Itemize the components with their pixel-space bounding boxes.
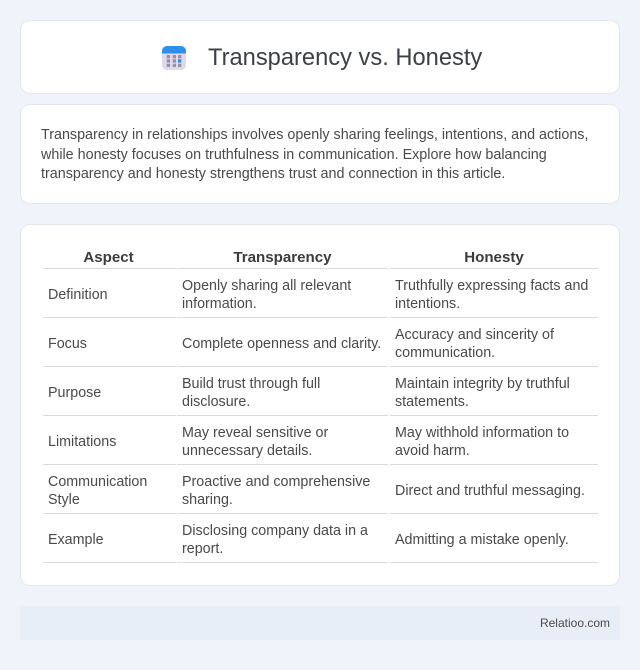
footer bbox=[20, 606, 620, 640]
row: Definition: information. bbox=[182, 296, 257, 312]
row: Focus: Complete openness and clarity. bbox=[182, 336, 381, 352]
row: Limitations: May withhold information to bbox=[395, 425, 569, 441]
row: Communication Style: Style bbox=[48, 492, 80, 508]
row: Communication Style: Communication bbox=[48, 474, 147, 490]
panel: comparison table bbox=[20, 224, 620, 586]
row: Definition: Truthfully expressing facts and bbox=[395, 278, 588, 294]
row: Purpose: statements. bbox=[395, 394, 469, 410]
row: Focus bbox=[48, 327, 554, 361]
row: Communication Style: Proactive and comprehensive bbox=[182, 474, 370, 490]
footer credit: Relatioo.com bbox=[540, 616, 610, 630]
row: Focus: Accuracy and sincerity of bbox=[395, 327, 554, 343]
table header bbox=[83, 249, 524, 266]
row: Definition: Openly sharing all relevant bbox=[182, 278, 351, 294]
row: Purpose: Build trust through full bbox=[182, 376, 320, 392]
row: Limitations bbox=[48, 425, 569, 459]
row: Limitations: unnecessary details. bbox=[182, 443, 312, 459]
row: Example: Admitting a mistake openly. bbox=[395, 532, 569, 548]
row: Purpose: Maintain integrity by truthful bbox=[395, 376, 570, 392]
row: Limitations: Limitations bbox=[48, 434, 116, 450]
row: Example bbox=[48, 523, 569, 557]
row: Definition: Definition bbox=[48, 287, 108, 303]
row: Focus: communication. bbox=[395, 345, 495, 361]
table header: Honesty bbox=[464, 249, 524, 266]
row: Definition bbox=[48, 278, 588, 312]
row: Purpose: Purpose bbox=[48, 385, 101, 401]
panel: title card bbox=[20, 20, 620, 94]
row: Purpose bbox=[48, 376, 570, 410]
text block: introduction: while honesty focuses on truthfulness in communication. Explore how balancing bbox=[41, 147, 547, 163]
title: Transparency vs. Honesty bbox=[208, 45, 482, 71]
row: Definition: intentions. bbox=[395, 296, 460, 312]
row: Example: report. bbox=[182, 541, 223, 557]
text block: introduction: Transparency in relationships involves openly sharing feelings, intentions, and actions, bbox=[41, 127, 588, 143]
row: Limitations: avoid harm. bbox=[395, 443, 470, 459]
row: Communication Style bbox=[48, 474, 585, 508]
table header: Aspect bbox=[83, 249, 134, 266]
icon: calendar bbox=[162, 46, 186, 70]
row: Limitations: May reveal sensitive or bbox=[182, 425, 328, 441]
text block: introduction: transparency and honesty strengthens trust and connection in this article. bbox=[41, 166, 505, 182]
panel: introduction bbox=[20, 104, 620, 204]
row: Focus: Focus bbox=[48, 336, 87, 352]
row: Communication Style: sharing. bbox=[182, 492, 233, 508]
row: Communication Style: Direct and truthful messaging. bbox=[395, 483, 585, 499]
table header: Transparency bbox=[233, 249, 332, 266]
row: Purpose: disclosure. bbox=[182, 394, 250, 410]
text block: introduction bbox=[41, 127, 588, 182]
row: Example: Disclosing company data in a bbox=[182, 523, 368, 539]
row: Example: Example bbox=[48, 532, 104, 548]
